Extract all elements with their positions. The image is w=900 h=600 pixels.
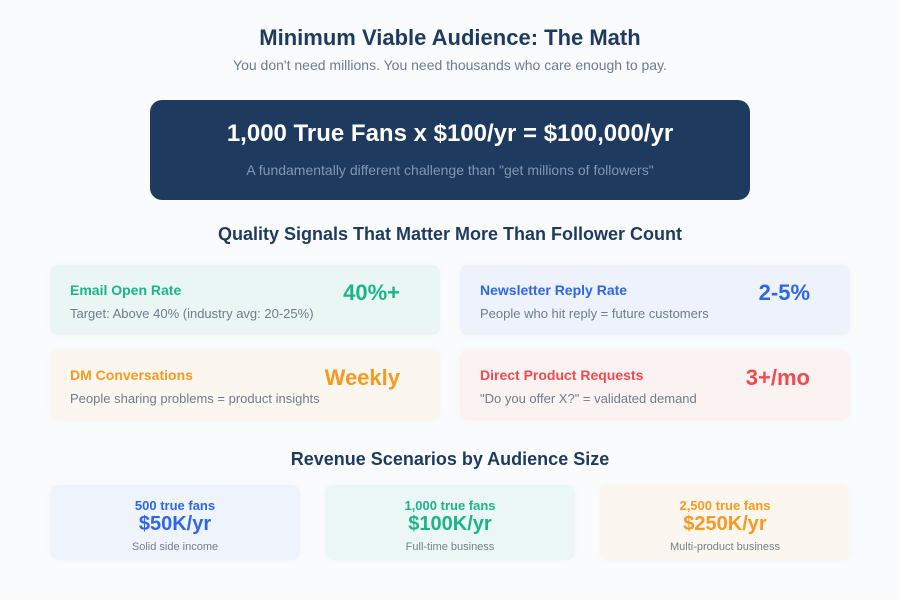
value: Weekly [325,365,401,390]
title: Minimum Viable Audience: The Math [259,25,641,50]
revenue: $250K/yr [683,513,767,535]
heading: revenue scenarios: Revenue Scenarios by Audience Size [291,449,609,469]
description: Target: Above 40% (industry avg: 20-25%) [70,306,314,321]
label: Direct Product Requests [480,367,644,383]
audience: 500 true fans [135,498,215,513]
description: People sharing problems = product insights [70,391,320,406]
description: People who hit reply = future customers [480,306,709,321]
note: Multi-product business [670,541,781,553]
value: 3+/mo [746,365,810,390]
panel: 500 true fans [50,485,300,560]
audience: 1,000 true fans [404,498,496,513]
formula: 1,000 True Fans x $100/yr = $100,000/yr [227,120,673,147]
panel: formula banner [150,100,750,200]
description: "Do you offer X?" = validated demand [480,391,697,406]
label: DM Conversations [70,367,193,383]
panel: direct product requests [460,350,850,420]
heading: quality signals: Quality Signals That Matter More Than Follower Count [218,224,682,244]
audience: 2,500 true fans [679,498,771,513]
formula caption: A fundamentally different challenge than "get millions of followers" [246,162,654,178]
panel: 2,500 true fans [600,485,850,560]
subtitle: You don't need millions. You need thousands who care enough to pay. [233,57,667,73]
revenue: $100K/yr [408,513,492,535]
value: 2-5% [759,280,810,305]
revenue: $50K/yr [139,513,211,535]
panel: dm conversations [50,350,440,420]
panel: newsletter reply rate [460,265,850,335]
panel: email open rate [50,265,440,335]
label: Email Open Rate [70,282,181,298]
note: Full-time business [406,541,495,553]
label: Newsletter Reply Rate [480,282,627,298]
note: Solid side income [132,541,218,553]
panel: 1,000 true fans [325,485,575,560]
value: 40%+ [343,280,400,305]
